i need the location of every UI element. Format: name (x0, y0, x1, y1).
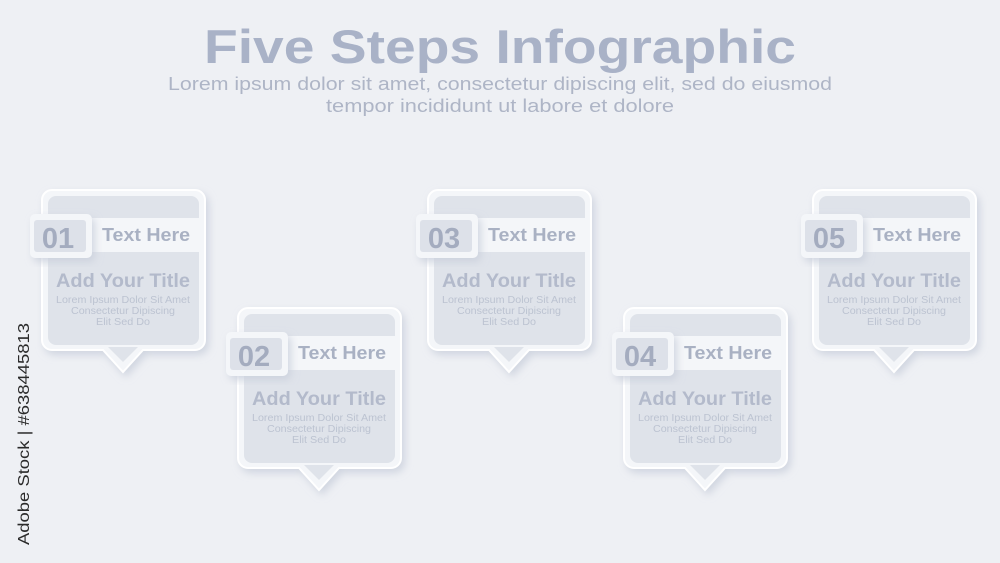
step 3: 03 (428, 223, 460, 255)
step 1: 01 (42, 223, 74, 255)
step 4 (612, 308, 787, 490)
title: Five Steps Infographic (204, 20, 796, 73)
step 2 (226, 308, 401, 490)
subtitle: tempor incididunt ut labore et dolore (326, 96, 674, 116)
subtitle (168, 74, 832, 116)
step 4: 04 (624, 341, 656, 373)
subtitle: Lorem ipsum dolor sit amet, consectetur dipiscing elit, sed do eiusmod (168, 74, 832, 94)
step 5: 05 (813, 223, 845, 255)
stock id: Adobe Stock | #638445813 (16, 323, 33, 545)
step 5 (801, 190, 976, 372)
step 2: 02 (238, 341, 270, 373)
step 3 (416, 190, 591, 372)
step 1 (30, 190, 205, 372)
